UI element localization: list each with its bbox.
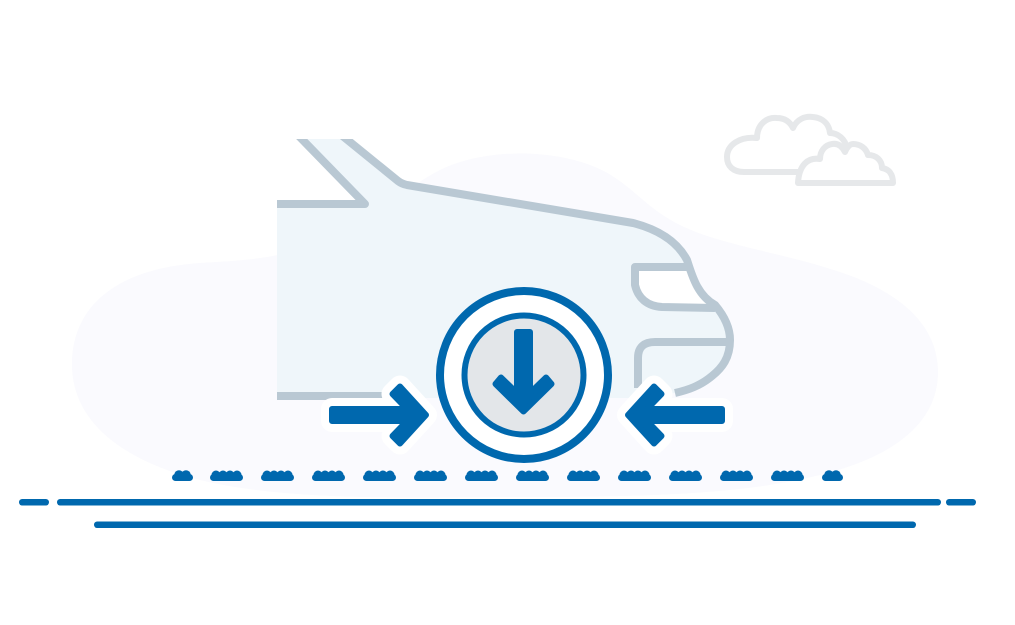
- wheel: [440, 291, 608, 459]
- road lines: [19, 499, 976, 528]
- headlight outline: [635, 267, 715, 308]
- hood and front profile: [334, 129, 730, 393]
- bumper intake: [638, 342, 727, 388]
- arrow: pressing from right: [628, 386, 722, 444]
- arrow: pressing from left: [332, 386, 426, 444]
- background blob: [72, 154, 938, 497]
- icon: down arrow: [496, 332, 552, 412]
- headlight: [639, 271, 706, 304]
- tire tread marks: [172, 470, 843, 481]
- car body fill: [277, 139, 730, 398]
- cloud: large: [727, 117, 847, 172]
- car outlines: [277, 129, 730, 396]
- clouds: [727, 117, 893, 183]
- wheel outer ring: [440, 291, 608, 459]
- car: [277, 129, 730, 398]
- cloud: small: [798, 144, 893, 183]
- side window: [277, 129, 365, 204]
- wheel hub: [464, 316, 584, 434]
- illustration: car tire pressed onto road: [19, 114, 976, 528]
- sill: [277, 392, 385, 400]
